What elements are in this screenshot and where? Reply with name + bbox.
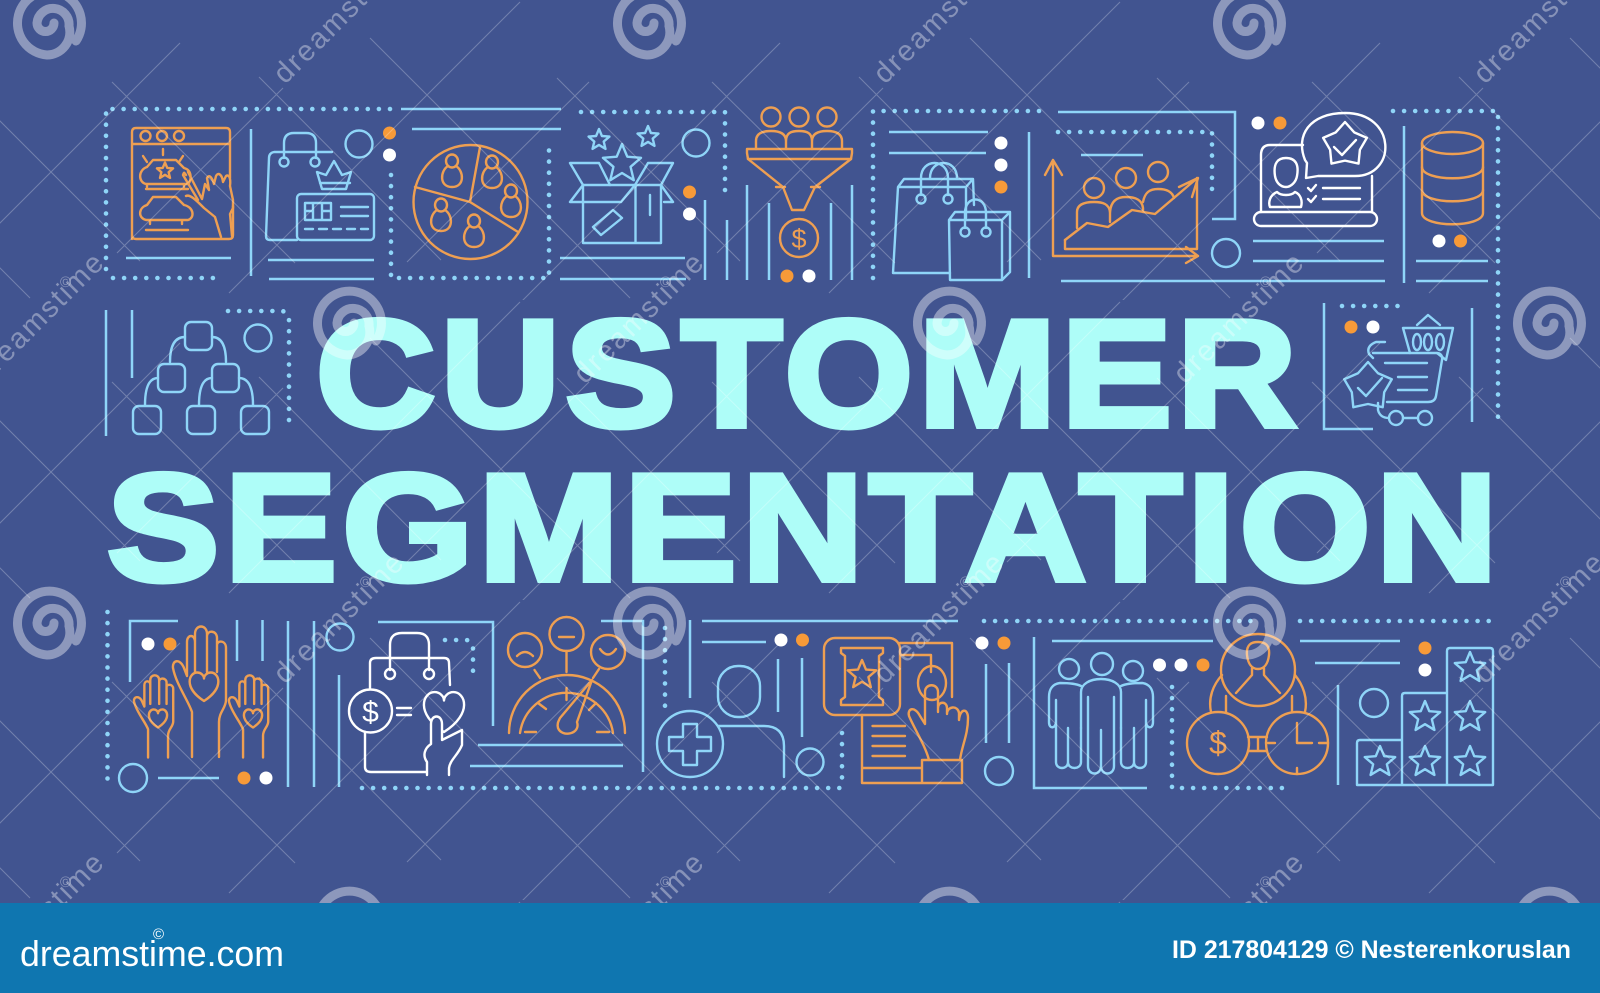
- watermark text: dreamstime: [1167, 847, 1310, 990]
- icon: customers funnel into dollar coin: $: [791, 224, 807, 254]
- watermark text: dreamstime: [567, 847, 710, 990]
- icon: customer with money and time: [1187, 634, 1328, 774]
- icon: pie chart with customer groups: [414, 145, 528, 259]
- middle frame lines: [106, 303, 1472, 436]
- icon: shopping bag with crown and loyalty card: [266, 133, 374, 240]
- icon: customers funnel into dollar coin: [747, 108, 852, 257]
- watermark text: ©: [360, 574, 371, 591]
- icon: star rating bars: [1357, 648, 1493, 785]
- icon: shopping cart with checklist and basket: [1344, 315, 1453, 425]
- title: [107, 289, 1503, 613]
- footer logo: dreamstime.com: [20, 933, 284, 974]
- footer credit: ID 217804129 © Nesterenkoruslan: [1172, 936, 1571, 964]
- icon: person with medical plus: [657, 666, 784, 777]
- icon: open box with stars: [570, 126, 673, 243]
- bottom frame lines and dotted borders: [108, 612, 1489, 788]
- icon: database cylinder: [1422, 132, 1483, 224]
- watermark text: ©: [60, 274, 71, 291]
- icon: hierarchy tree: [133, 322, 269, 434]
- watermark text: dreamstime: [267, 547, 410, 690]
- icon: shopping bag, price equals love: [349, 633, 464, 775]
- bottom row accent dots and circles: [119, 624, 1432, 792]
- icon: group of three customers: [1049, 653, 1153, 774]
- icon: growth chart with people: [1045, 160, 1198, 263]
- icon: shopping bag, price equals love: $: [362, 696, 379, 729]
- top frame lines and dotted borders: [106, 109, 1498, 422]
- watermark text: ©: [1260, 874, 1271, 891]
- watermark text: ©: [660, 274, 671, 291]
- watermark text: ©: [60, 874, 71, 891]
- title: CUSTOMER: [316, 289, 1302, 459]
- icon: customer satisfaction gauge: [508, 617, 625, 734]
- icon: product catalogue on tablet with tapping hand: [824, 638, 968, 783]
- watermark text: ©: [960, 574, 971, 591]
- icon: customer profile review on laptop: [1254, 113, 1385, 226]
- icon: raised hands with hearts: [134, 626, 268, 758]
- footer bar: [0, 903, 1600, 993]
- watermark text: dreamstime: [867, 547, 1010, 690]
- footer logo: ©: [153, 926, 164, 943]
- watermark text: dreamstime: [567, 247, 710, 390]
- title line two: SEGMENTATION: [107, 443, 1503, 613]
- icon: customer with money and time: $: [1209, 725, 1227, 761]
- watermark text: ©: [1560, 574, 1571, 591]
- watermark text: dreamstime: [1167, 247, 1310, 390]
- watermark text: ©: [660, 874, 671, 891]
- icon: browser with cars and pointing hand: [132, 128, 233, 239]
- top row accent dots and circles: [346, 116, 1467, 282]
- icon: two shopping bags: [893, 163, 1010, 280]
- watermark text: ©: [1260, 274, 1271, 291]
